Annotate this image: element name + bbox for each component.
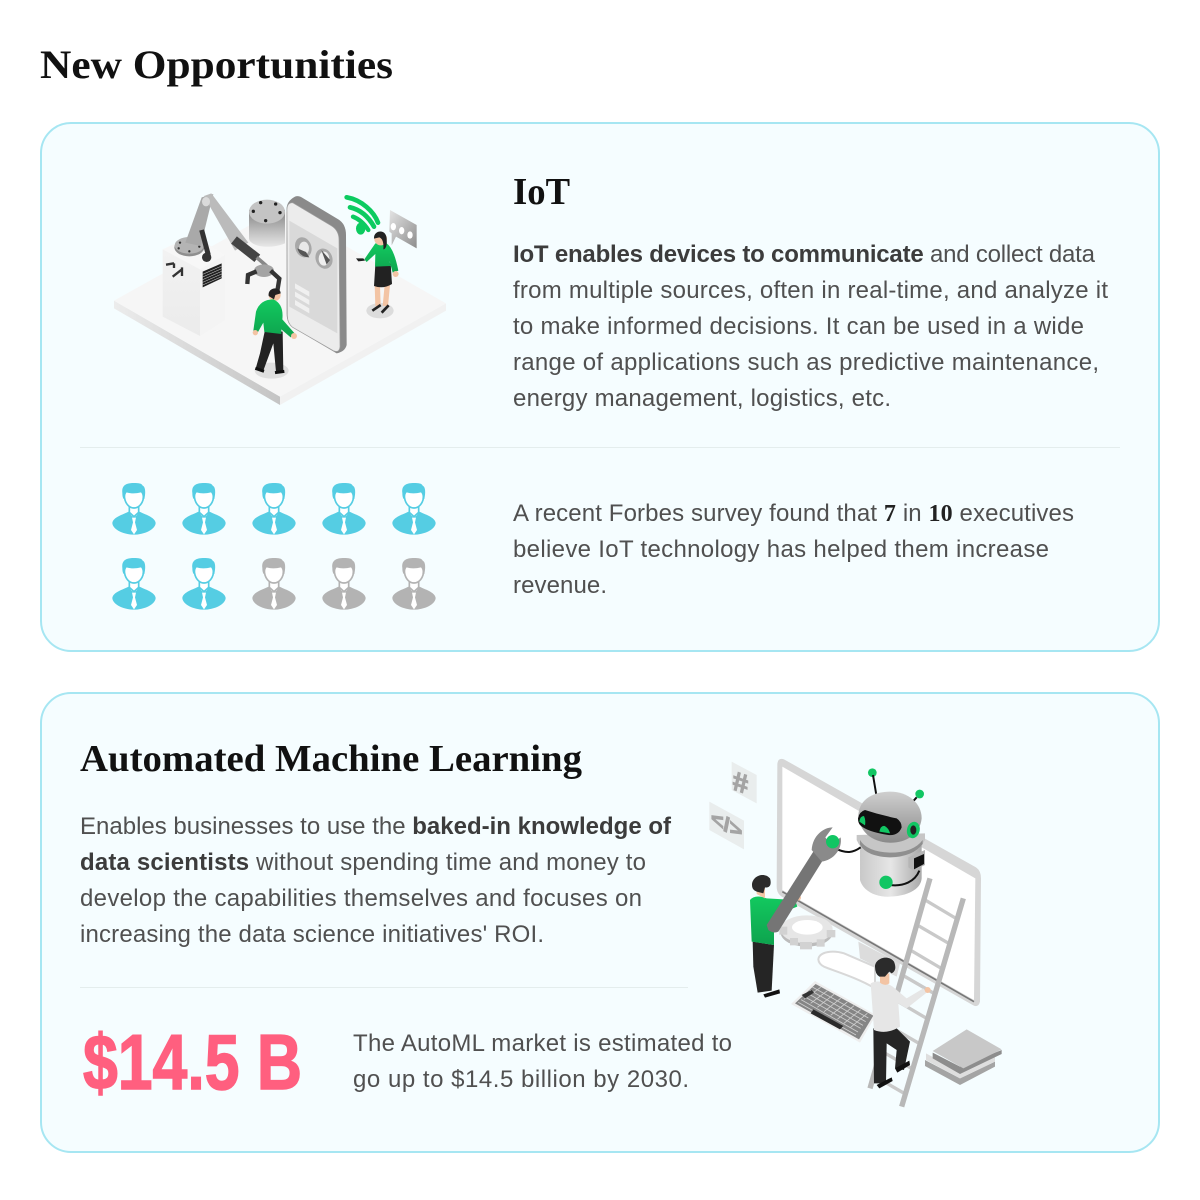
stat: $14.5 B: $14.5 B <box>83 1018 302 1106</box>
gear <box>779 915 835 949</box>
icon: code tag: </> <box>711 805 742 844</box>
pictogram: 7 in 10 executives <box>112 483 436 610</box>
text: IoT description <box>513 241 1108 412</box>
text: market estimate: go up to $14.5 billion by 2030. <box>353 1066 689 1093</box>
text: IoT description: energy management, logistics, etc. <box>513 385 891 412</box>
monitor <box>777 759 981 1006</box>
panel: IoT <box>41 123 1159 651</box>
heading: IoT: IoT <box>513 171 570 213</box>
text: AutoML description: Enables businesses to use the baked-in knowledge of <box>80 813 672 840</box>
keyboard <box>791 981 876 1043</box>
illustration: AutoML robot scene <box>709 759 1002 1107</box>
books <box>925 1029 1002 1085</box>
figure: woman with phone <box>356 231 399 318</box>
text: AutoML description <box>80 813 672 948</box>
text: IoT description: to make informed decisions. It can be used in a wide <box>513 313 1084 340</box>
text: IoT description: IoT enables devices to communicate and collect data <box>513 241 1096 268</box>
icon: hash tag <box>732 762 757 803</box>
heading: Automated Machine Learning: Automated Machine Learning <box>80 738 582 780</box>
title: New Opportunities <box>40 42 393 87</box>
icon: hash tag: # <box>733 765 748 802</box>
figure: man on ladder <box>871 958 931 1088</box>
text: AutoML description: develop the capabilities themselves and focuses on <box>80 885 642 912</box>
text: Forbes survey: believe IoT technology has helped them increase <box>513 536 1049 563</box>
illustration: IoT factory scene <box>114 193 446 405</box>
text: IoT description: range of applications such as predictive maintenance, <box>513 349 1099 376</box>
figure: man walking <box>253 288 297 379</box>
text: market estimate <box>353 1030 732 1093</box>
text: Forbes survey <box>513 500 1074 599</box>
panel: Automated Machine Learning <box>41 693 1159 1152</box>
ladder <box>870 878 963 1107</box>
text: market estimate: The AutoML market is estimated to <box>353 1030 732 1057</box>
text: Forbes survey: A recent Forbes survey found that 7 in 10 executives <box>513 500 1074 527</box>
text: AutoML description: increasing the data science initiatives' ROI. <box>80 921 544 948</box>
text: IoT description: from multiple sources, often in real-time, and analyze it <box>513 277 1108 304</box>
figure: man with wrench <box>750 827 841 998</box>
text: Forbes survey: revenue. <box>513 572 607 599</box>
robot <box>835 768 925 897</box>
text: AutoML description: data scientists without spending time and money to <box>80 849 646 876</box>
wrench <box>767 827 841 933</box>
